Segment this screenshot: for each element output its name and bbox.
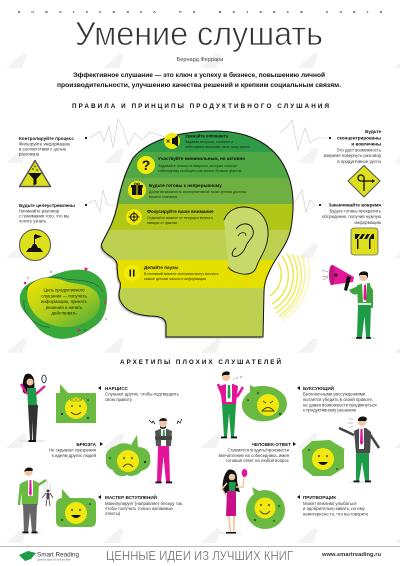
archetype: narcissus: свою правоту xyxy=(105,397,133,402)
tip: be purposeful: хотите узнать xyxy=(19,218,47,224)
band 4: focus: Отделяйте важное от несущественного, xyxy=(147,216,214,220)
tip: control the process: разговора xyxy=(19,152,40,156)
author: Бернард Феррари xyxy=(177,57,223,63)
band 2: participate: Участвуйте минимальным, но активно xyxy=(158,155,245,161)
archetype: grumbler: Не скрывает презрения xyxy=(49,448,97,452)
sound waves xyxy=(270,254,309,321)
icon: question mark: ? xyxy=(142,157,150,173)
arrow marker xyxy=(293,442,296,446)
archetype: man-answer xyxy=(219,417,379,483)
figure: woman with mirror xyxy=(19,374,46,442)
tip: control the process: Фильтруйте информацию xyxy=(19,142,71,146)
section heading: archetypes: АРХЕТИПЫ ПЛОХИХ СЛУШАТЕЛЕЙ xyxy=(120,357,281,366)
head outline xyxy=(101,131,293,337)
band 4: focus xyxy=(126,208,214,225)
icon: road barrier sign xyxy=(351,228,378,255)
tip: be focused and engaged: вовремя повернуть разговор xyxy=(324,153,382,158)
figure: man pointing xyxy=(339,417,379,483)
tip: finish on time: информацию xyxy=(354,220,382,225)
round bubble with fake smile xyxy=(246,487,285,529)
band 4: focus: эмоции от фактов xyxy=(147,221,177,225)
band 5: pauses: самые ценные мысли и информация xyxy=(144,277,206,281)
footer xyxy=(0,546,400,563)
archetype: man-answer: ЧЕЛОВЕК-ОТВЕТ xyxy=(252,442,291,447)
tip: be focused and engaged: Это даст возможность xyxy=(336,148,382,152)
archetype: master of openers: чтобы получать только желаемые xyxy=(105,506,173,511)
archetype: master of openers: ответы) xyxy=(105,511,121,516)
section heading: rules: ПРАВИЛА И ПРИНЦИПЫ ПРОДУКТИВНОГО СЛУШАНИЯ xyxy=(72,103,329,110)
tip: be purposeful: Будьте целеустремлены xyxy=(19,203,75,208)
archetype: grumbler xyxy=(49,418,182,484)
tip: be purposeful xyxy=(19,203,75,260)
icon: muted speaker xyxy=(164,133,180,149)
band 2: participate: Задавайте только те вопросы, которые помогут xyxy=(158,164,238,168)
ear xyxy=(224,207,268,274)
band 1: respect the opponent: собеседнике высказать свою точку зрения xyxy=(185,145,250,149)
archetype: master of openers: МАСТЕР ВСТУПЛЕНИЙ xyxy=(105,493,157,500)
figure: man with crossed arms xyxy=(149,418,182,484)
band 5: pauses: В неловкий момент молчания могут всплыть xyxy=(144,272,219,276)
tip: control the process: Контролируйте процесс xyxy=(19,135,74,141)
tip: control the process xyxy=(19,135,74,186)
band 3: be ready xyxy=(128,181,246,199)
band 1: respect the opponent: Уважайте оппонента xyxy=(185,132,228,138)
footer slogan: ЦЕННЫЕ ИДЕИ ИЗ ЛУЧШИХ КНИГ xyxy=(106,549,293,563)
archetype: master of openers xyxy=(18,468,183,534)
arrow marker xyxy=(100,442,103,446)
band 5: pauses xyxy=(124,264,219,281)
polygon bubble with worried face xyxy=(302,440,345,476)
intro text: производительности, улучшению качества решений и крепким социальным связям. xyxy=(57,81,341,89)
tip: control the process: в соответствии с целью xyxy=(19,146,67,152)
speech bubble with smirking face xyxy=(56,489,96,527)
band 2: participate: собеседнику сообщить как можно больше фактов xyxy=(158,169,241,173)
oval bubble with angry face xyxy=(242,385,287,421)
archetype: narcissus xyxy=(19,374,180,442)
archetype: spinning wheels: к продуктивному решению xyxy=(303,408,357,412)
blob text xyxy=(41,288,88,316)
tip: finish on time: Заканчивайте вовремя xyxy=(328,202,381,208)
band 3: be ready: Дойти возможность альтернативной точки зрения достичь xyxy=(149,190,246,194)
archetype: pretender: неинтересно то, что вы говорите xyxy=(303,512,369,516)
tip: finish on time: обсуждение, получив нужную xyxy=(322,214,382,219)
blob text: действовать xyxy=(51,310,77,316)
blob text: Цель продуктивного xyxy=(43,288,85,292)
intro text: Эффективное слушание — это ключ к успеху в бизнесе, повышению личной xyxy=(73,71,325,79)
icon: flag on hill xyxy=(20,230,50,260)
tip: be focused and engaged: и вовлечены xyxy=(351,142,381,146)
blob text: решения и начать xyxy=(46,305,83,310)
archetype: narcissus: НАРЦИСС xyxy=(105,386,129,391)
arrow marker xyxy=(98,495,101,499)
icon: gift xyxy=(128,181,146,199)
band 3: be ready: вашего сознания xyxy=(149,195,177,199)
icon: pause xyxy=(124,265,140,281)
figure: man with puppet xyxy=(18,468,53,534)
head diagram xyxy=(100,130,294,338)
kicker line: ИНФОГРАФИКА ПО МОТИВАМ КНИГИ xyxy=(18,10,382,14)
archetype: grumbler: БРЮЗГА xyxy=(76,442,97,447)
archetype: spinning wheels: Бесконечными рассуждениями xyxy=(303,392,366,396)
tip: be focused and engaged: в продуктивное русло xyxy=(337,159,382,164)
intro text xyxy=(57,71,341,89)
icon: logo xyxy=(19,551,36,561)
head shadow xyxy=(100,132,292,338)
blob background xyxy=(20,270,107,339)
band 4: focus: Фокусируйте ваше внимание xyxy=(147,208,214,214)
blob text: слушания — получить xyxy=(41,294,87,298)
band 2: participate xyxy=(137,155,245,174)
goal blob xyxy=(20,268,107,339)
icon: loop road sign xyxy=(348,166,380,197)
arrow marker xyxy=(98,386,101,390)
archetype: man-answer: впечатление на собеседника, имея xyxy=(219,453,290,458)
archetype: narcissus: Слушают других, чтобы подтвердить xyxy=(105,392,180,396)
blob text: информацию, принять xyxy=(41,299,88,304)
tip: be focused and engaged xyxy=(324,129,382,197)
website: www.smartreading.ru xyxy=(321,552,381,558)
archetype: pretender xyxy=(218,469,369,534)
brand name: Smart Reading xyxy=(37,552,79,558)
archetype: pretender: ПРИТВОРЩИК xyxy=(303,495,336,500)
arrow marker xyxy=(297,386,300,390)
tip: finish on time: Будьте готовы прекратить xyxy=(329,208,382,214)
archetype: master of openers: Манипулирует (направляет беседу так, xyxy=(105,501,183,506)
archetype: spinning wheels: не давая возможности продвинуться xyxy=(303,402,377,408)
archetype: pretender: Может вежливо улыбаться xyxy=(303,501,357,506)
archetype: man-answer: Стремятся угодить/произвести xyxy=(227,448,290,452)
archetype: pretender: и одобрительно кивать, но ему xyxy=(303,506,366,511)
archetype: spinning wheels xyxy=(216,371,377,439)
head bands xyxy=(102,132,293,336)
figure: man with megaphone xyxy=(322,265,377,340)
figure: man in pink jacket xyxy=(216,371,243,439)
tip: be purposeful: Начинайте разговор xyxy=(19,208,60,214)
title: Умение слушать xyxy=(75,15,323,52)
band 1: respect the opponent xyxy=(164,132,250,149)
archetype: spinning wheels: БУКСУЮЩИЙ xyxy=(303,384,334,391)
band 5: pauses: Делайте паузы xyxy=(144,264,178,270)
figure: woman with mask xyxy=(218,469,247,534)
zigzag signal lines xyxy=(85,119,331,213)
cloud bubble with sad face xyxy=(106,435,150,476)
tip: be focused and engaged: Будьте xyxy=(365,129,381,134)
brand tagline: Ценные идеи из лучших книг xyxy=(37,558,71,562)
arrow marker xyxy=(297,495,300,499)
icon: funnel sign xyxy=(20,160,50,186)
band 3: be ready: Будьте готовы к непрерывному xyxy=(149,183,222,188)
archetype: man-answer: готовый ответ на любой вопрос xyxy=(226,458,290,463)
band 1: respect the opponent: Задавая вопросы, помните о xyxy=(185,140,233,144)
tip: be purposeful: с понимания того, что вы xyxy=(19,214,69,218)
tip: finish on time xyxy=(322,202,382,255)
tip: be focused and engaged: сконцентрированы xyxy=(337,136,381,140)
icon: target xyxy=(126,209,142,225)
archetype: grumbler: к идеям других людей xyxy=(52,453,97,458)
speech bubble with crowned face xyxy=(56,384,96,423)
archetype: spinning wheels: пытается убедить в своей правоте, xyxy=(303,397,373,402)
